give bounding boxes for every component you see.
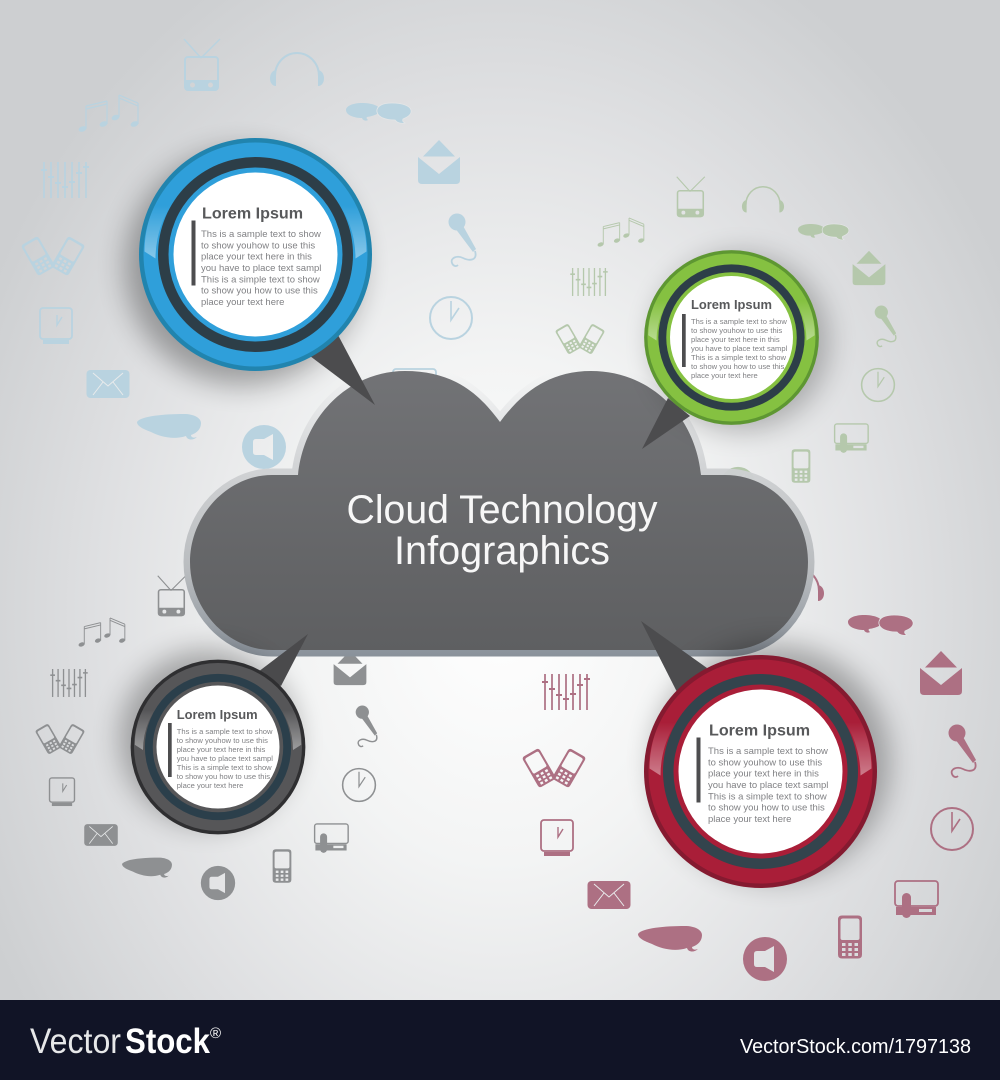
- icon: chat: [848, 615, 913, 635]
- callout: red: [641, 621, 890, 888]
- text block: Ths is a sample text to show: [177, 727, 273, 736]
- pointer: [258, 634, 308, 686]
- pointer: [642, 398, 690, 449]
- icon: monitor clock: [541, 820, 573, 856]
- icon: open envelope: [334, 651, 366, 685]
- footer logo: Stock: [125, 1022, 210, 1061]
- pointer: [310, 335, 375, 405]
- icon: sliders: [41, 162, 89, 198]
- icon: open envelope: [853, 251, 885, 285]
- icon: sliders: [50, 669, 88, 697]
- text block: to show youhow to use this: [201, 240, 315, 251]
- icon: monitor clock: [40, 308, 72, 344]
- icon: mail: [86, 370, 130, 398]
- cloud title: Infographics: [394, 529, 610, 573]
- shadow: [653, 254, 829, 430]
- text block: place your text here in this: [177, 745, 266, 754]
- icon: speaker: [721, 467, 755, 501]
- icon: sliders: [542, 674, 590, 710]
- text block: to show you how to use this: [708, 803, 825, 814]
- text block: [201, 204, 321, 308]
- footer logo: [30, 1022, 221, 1061]
- text block: place your text here: [708, 814, 791, 825]
- pointer: [641, 621, 707, 692]
- icon: chat: [346, 103, 411, 123]
- text block: to show you how to use this: [201, 286, 318, 297]
- icon: speaker: [242, 425, 286, 469]
- icon: projector: [895, 881, 938, 918]
- icon: speaker: [743, 937, 787, 981]
- icon: mail: [588, 881, 630, 909]
- shadow: [125, 149, 361, 385]
- icons: red set: [522, 568, 976, 981]
- icon: monitor clock: [50, 778, 74, 806]
- text block: Ths is a sample text to show: [201, 229, 321, 240]
- shadow: [654, 644, 890, 880]
- text block: you have to place text sampl: [177, 754, 273, 763]
- icon: microphone: [948, 724, 976, 777]
- text block: to show youhow to use this: [177, 736, 268, 745]
- text block: Lorem Ipsum: [177, 707, 258, 722]
- icon: speech bubble: [137, 414, 201, 440]
- shadow: [120, 650, 296, 826]
- text block: place your text here: [177, 781, 243, 790]
- icon: music notes: [597, 218, 645, 247]
- icon: speech bubble: [122, 858, 172, 878]
- text block: you have to place text sampl: [691, 344, 788, 353]
- text block: Ths is a sample text to show: [708, 746, 828, 757]
- callout: grey: [120, 634, 308, 834]
- cloud title: Cloud Technology: [346, 488, 658, 532]
- icons: grey set: [35, 576, 377, 900]
- text block: Lorem Ipsum: [202, 204, 303, 222]
- icon: music notes: [78, 618, 126, 647]
- icon: headphones: [270, 53, 324, 86]
- text block: you have to place text sampl: [201, 263, 321, 274]
- icon: headphones: [770, 568, 824, 601]
- icon: projector: [393, 369, 436, 406]
- text block: place your text here: [691, 371, 758, 380]
- text block: to show youhow to use this: [708, 757, 822, 768]
- text block: place your text here in this: [691, 335, 780, 344]
- text block: place your text here in this: [201, 252, 312, 263]
- text block: [708, 722, 828, 825]
- footer logo: Vector: [30, 1022, 121, 1061]
- cloud title: [346, 488, 658, 573]
- icon: phone: [838, 916, 862, 958]
- text block: Lorem Ipsum: [691, 297, 772, 312]
- text block: [177, 707, 273, 790]
- icon: microphone: [448, 214, 476, 266]
- footer id: VectorStock.com/1797138: [740, 1036, 971, 1058]
- icon: clock: [931, 808, 973, 850]
- footer bar: [0, 1000, 1000, 1080]
- icon: clock: [430, 297, 472, 339]
- icon: microphone: [356, 706, 377, 747]
- text block: This is a simple text to show: [177, 763, 272, 772]
- footer logo: ®: [210, 1025, 221, 1042]
- icon: phones: [21, 236, 85, 276]
- text block: Ths is a sample text to show: [691, 317, 787, 326]
- icon: open envelope: [418, 140, 460, 184]
- text block: to show you how to use this: [177, 772, 270, 781]
- text block: to show you how to use this: [691, 362, 784, 371]
- icon: phones: [555, 323, 605, 355]
- icon: speaker: [201, 866, 235, 900]
- icon: phones: [35, 723, 85, 755]
- text block: to show youhow to use this: [691, 326, 782, 335]
- text block: This is a simple text to show: [201, 274, 320, 285]
- callout: green: [642, 250, 829, 449]
- icon: sliders: [570, 268, 608, 296]
- icon: phone: [792, 449, 810, 483]
- icon: tv: [184, 39, 220, 91]
- icon: tv: [677, 177, 705, 217]
- callout: blue: [125, 138, 375, 405]
- icon: phones: [522, 748, 586, 788]
- icon: projector: [315, 824, 348, 853]
- text block: This is a simple text to show: [691, 353, 786, 362]
- icon: projector: [835, 424, 868, 453]
- icon: headphones: [742, 187, 784, 212]
- icon: phone: [273, 849, 291, 883]
- icons: green set: [555, 177, 896, 501]
- icon: open envelope: [920, 651, 962, 695]
- icon: microphone: [875, 306, 896, 347]
- icon: tv: [158, 576, 186, 616]
- icon: clock: [862, 369, 894, 401]
- text block: [691, 297, 788, 380]
- icons: blue set: [21, 39, 476, 469]
- text block: you have to place text sampl: [708, 780, 828, 791]
- text block: place your text here: [201, 297, 284, 308]
- icon: mail: [84, 824, 118, 846]
- text block: place your text here in this: [708, 769, 819, 780]
- icon: speech bubble: [638, 926, 702, 952]
- icon: music notes: [78, 95, 139, 133]
- icon: chat: [798, 224, 849, 240]
- text block: This is a simple text to show: [708, 791, 827, 802]
- cloud: [190, 371, 808, 650]
- icon: clock: [343, 769, 375, 801]
- text block: Lorem Ipsum: [709, 722, 810, 740]
